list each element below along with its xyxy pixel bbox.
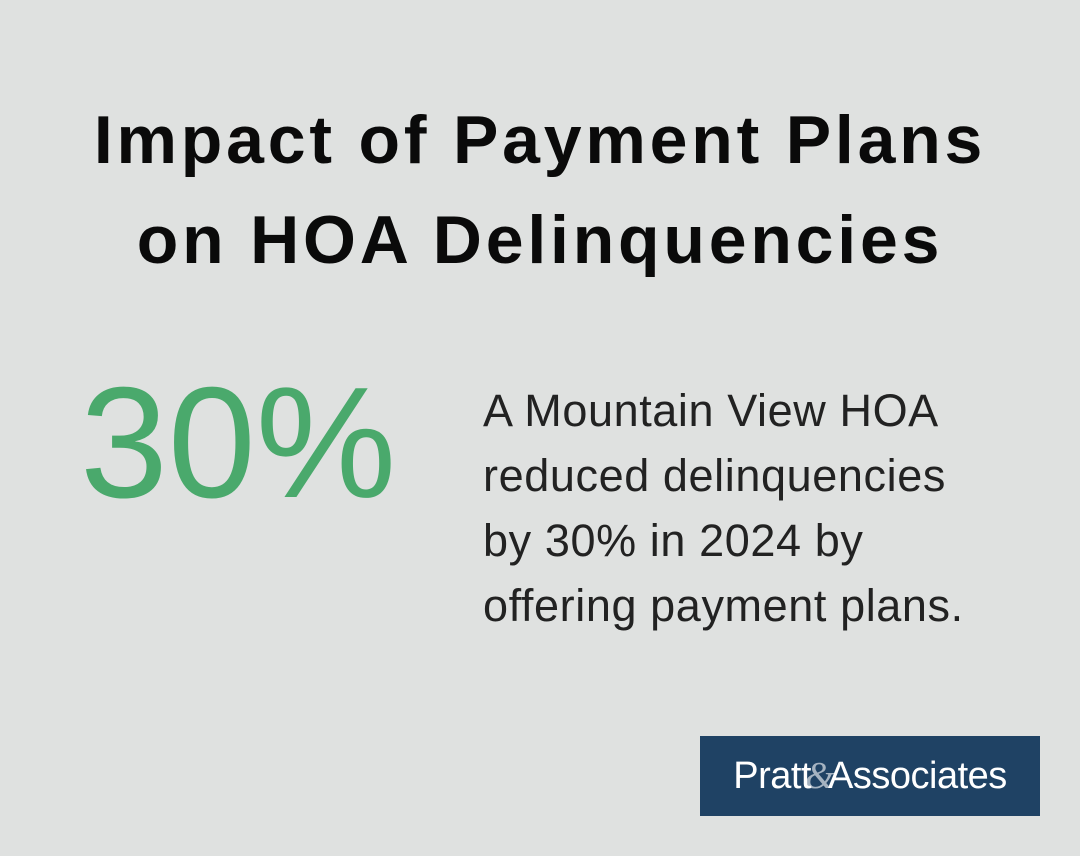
- description text: offering payment plans.: [483, 580, 964, 631]
- description text: by 30% in 2024 by: [483, 515, 863, 566]
- title: Impact of Payment Plans: [94, 102, 986, 178]
- big stat: 30%: [80, 355, 396, 531]
- title: [94, 102, 986, 278]
- logo: [700, 736, 1040, 816]
- logo: Pratt&Associates: [733, 755, 1007, 797]
- description text: [483, 385, 964, 631]
- description text: A Mountain View HOA: [483, 385, 939, 436]
- title: on HOA Delinquencies: [137, 202, 943, 278]
- description text: reduced delinquencies: [483, 450, 946, 501]
